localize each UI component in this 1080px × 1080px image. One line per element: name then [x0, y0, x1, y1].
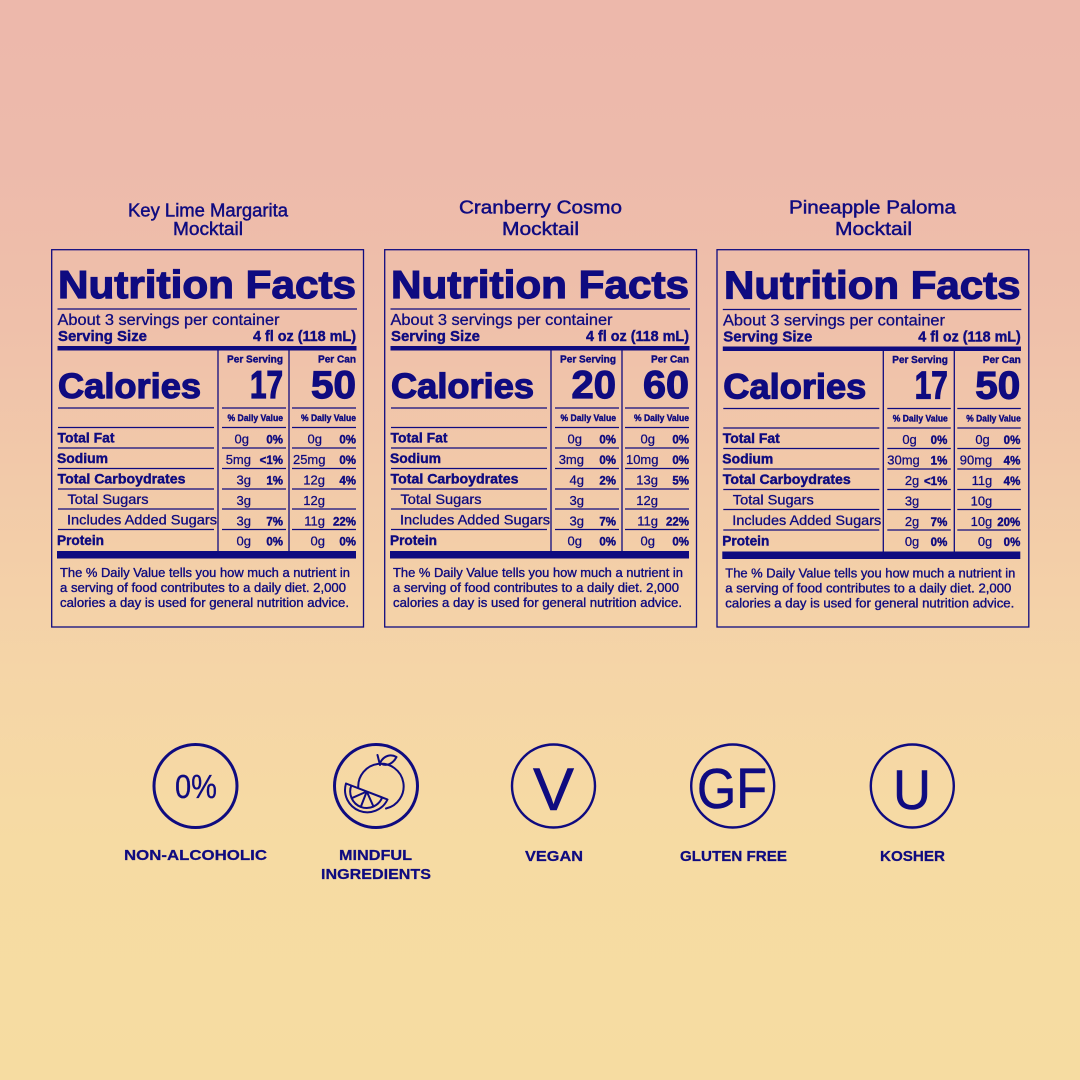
per serving values: 0%	[931, 435, 947, 447]
per can values: 0%	[1004, 435, 1020, 447]
label frame	[385, 250, 696, 627]
serving info	[390, 312, 689, 345]
calories row: 50	[311, 364, 356, 407]
per can values: 11g	[304, 514, 325, 528]
per can values: 20%	[997, 517, 1020, 529]
serving info: About 3 servings per container	[390, 312, 612, 329]
per serving values	[887, 432, 947, 549]
calories row	[58, 354, 356, 423]
heading: Nutrition Facts	[391, 264, 689, 307]
product title: Cranberry Cosmo	[459, 198, 622, 218]
per can values: 13g	[636, 472, 658, 488]
icon: gluten free GF: GF	[697, 757, 767, 821]
thick bars	[57, 346, 356, 558]
calories row: Per Can	[651, 354, 689, 366]
label: non-alcoholic: NON-ALCOHOLIC	[124, 847, 267, 864]
per serving values: 0g	[902, 432, 917, 447]
per can values: 10mg	[626, 452, 658, 467]
panel: Cranberry Cosmo	[385, 198, 696, 627]
per can values: 0%	[339, 434, 356, 446]
per serving values: 7%	[931, 517, 947, 529]
footnote: a serving of food contributes to a daily diet. 2,000	[393, 581, 679, 595]
label: vegan: VEGAN	[525, 848, 583, 865]
per can values: 0g	[978, 534, 992, 549]
per serving values: 0%	[599, 536, 616, 548]
per serving values: 0%	[266, 536, 283, 548]
icon: non-alcoholic 0%: 0%	[175, 768, 217, 805]
calories row: % Daily Value	[301, 413, 356, 423]
serving info: Serving Size	[391, 328, 480, 345]
per serving values: 0g	[568, 534, 582, 548]
per can values: 11g	[972, 473, 992, 488]
footnote	[393, 566, 683, 610]
label: gluten free: GLUTEN FREE	[680, 848, 787, 865]
per serving values: <1%	[260, 455, 283, 467]
per serving values	[559, 432, 616, 548]
icon: citrus fruit	[334, 744, 418, 828]
label: mindful ingredients	[321, 847, 431, 883]
per serving values: 4g	[570, 472, 584, 488]
nutrient labels: Total Carboydrates	[723, 472, 851, 487]
per can values: 0%	[672, 434, 689, 446]
calories row: % Daily Value	[966, 414, 1021, 424]
label: mindful ingredients: MINDFUL	[339, 847, 412, 864]
per can values: 22%	[333, 516, 356, 528]
per can values: 12g	[303, 493, 325, 508]
panel: Pineapple Paloma	[717, 198, 1029, 627]
serving info: Serving Size	[723, 328, 812, 346]
per serving values	[226, 432, 283, 548]
calories row: 20	[572, 364, 616, 407]
per serving values: 1%	[931, 456, 947, 468]
per can values: 0%	[672, 455, 689, 467]
per can values: 12g	[636, 493, 658, 508]
calories row: % Daily Value	[634, 413, 689, 423]
nutrient labels: Total Fat	[723, 431, 780, 446]
per can values: 0g	[308, 432, 322, 446]
label frame	[52, 250, 363, 627]
footnote: a serving of food contributes to a daily diet. 2,000	[725, 582, 1011, 596]
serving info: 4 fl oz (118 mL)	[586, 328, 689, 345]
footnote: a serving of food contributes to a daily diet. 2,000	[60, 581, 346, 595]
per can values: 0g	[641, 534, 655, 548]
thick bars	[722, 346, 1021, 559]
serving info	[723, 312, 1021, 346]
per can values	[626, 432, 689, 548]
calories row: 60	[643, 364, 689, 407]
per can values: 90mg	[960, 452, 992, 468]
per serving values: 0%	[931, 537, 947, 549]
calories row: 17	[250, 364, 283, 407]
per serving values: 3g	[237, 493, 251, 508]
per can values: 4%	[339, 476, 356, 488]
thick bars	[390, 346, 690, 558]
nutrient labels: Total Carboydrates	[390, 472, 518, 486]
per can values: 4%	[1004, 456, 1020, 468]
nutrient labels	[390, 431, 550, 548]
per serving values: 0%	[599, 455, 616, 467]
per serving values: 0g	[905, 534, 919, 549]
nutrient labels: Total Fat	[58, 431, 115, 446]
heading: Nutrition Facts	[724, 264, 1020, 308]
calories row: 17	[915, 364, 948, 408]
serving info: 4 fl oz (118 mL)	[253, 328, 356, 345]
calories row: Per Serving	[227, 354, 283, 366]
per serving values: 2g	[905, 473, 919, 488]
nutrient labels: Sodium	[390, 451, 441, 466]
nutrient labels: Protein	[57, 533, 104, 548]
per serving values: 2%	[599, 476, 616, 488]
calories row: Calories	[391, 367, 534, 406]
nutrient labels: Includes Added Sugars	[732, 512, 881, 528]
per serving values: 7%	[599, 516, 616, 528]
calories row	[723, 354, 1021, 424]
serving info: Serving Size	[58, 328, 147, 345]
nutrient labels: Total Sugars	[68, 491, 148, 507]
footnote: calories a day is used for general nutrition advice.	[393, 596, 682, 610]
per serving values: 0%	[599, 434, 616, 446]
calories row: Per Can	[318, 354, 356, 366]
footnote: The % Daily Value tells you how much a nutrient in	[725, 566, 1015, 580]
icon: vegan V: V	[533, 756, 574, 823]
icon: non-alcoholic 0%	[154, 744, 237, 828]
per serving values: <1%	[924, 476, 947, 488]
footnote: The % Daily Value tells you how much a nutrient in	[393, 566, 683, 580]
per serving values: 7%	[266, 516, 283, 528]
icon: kosher U	[871, 744, 954, 828]
table rules	[390, 309, 690, 551]
calories row: 50	[975, 364, 1020, 408]
product title: Mocktail	[835, 219, 912, 239]
per serving values: 30mg	[887, 452, 920, 468]
footnote	[60, 566, 350, 610]
nutrient labels: Protein	[722, 534, 769, 548]
footnote: The % Daily Value tells you how much a nutrient in	[60, 566, 350, 580]
per can values: 10g	[971, 514, 992, 529]
product title: Mocktail	[502, 219, 579, 239]
table rules	[723, 310, 1021, 552]
table rules	[58, 309, 357, 551]
nutrient labels	[57, 431, 217, 548]
per serving values: 3g	[570, 493, 584, 508]
nutrient labels: Total Sugars	[733, 492, 814, 508]
nutrient labels: Total Sugars	[400, 491, 482, 507]
nutrient labels: Sodium	[722, 452, 773, 466]
product title: Pineapple Paloma	[789, 198, 957, 218]
calories row: Calories	[723, 368, 866, 406]
calories row	[391, 354, 689, 423]
label frame	[717, 250, 1029, 627]
per can values	[960, 432, 1020, 549]
per can values: 10g	[971, 494, 992, 508]
per serving values: 0g	[568, 432, 582, 446]
per can values: 0g	[641, 432, 655, 446]
per can values: 25mg	[293, 452, 326, 467]
per can values: 4%	[1004, 476, 1020, 488]
nutrient labels: Includes Added Sugars	[400, 512, 550, 528]
per serving values: 0g	[235, 432, 249, 446]
per serving values: 3g	[570, 514, 584, 528]
label: kosher: KOSHER	[880, 848, 945, 865]
per can values: 5%	[672, 476, 689, 488]
per serving values: 3g	[237, 472, 251, 488]
product title	[128, 200, 289, 239]
product title	[459, 198, 622, 239]
footnote: calories a day is used for general nutrition advice.	[725, 596, 1014, 610]
serving info: 4 fl oz (118 mL)	[918, 328, 1021, 346]
nutrient labels	[722, 431, 881, 548]
per can values: 0%	[339, 455, 356, 467]
product title: Mocktail	[173, 219, 243, 239]
serving info	[58, 312, 356, 345]
per can values: 11g	[637, 514, 658, 528]
calories row: % Daily Value	[560, 413, 616, 423]
icon: vegan V	[512, 744, 595, 828]
per serving values: 3g	[905, 494, 919, 508]
per serving values: 5mg	[226, 452, 251, 467]
nutrient labels: Total Fat	[390, 431, 448, 446]
footnote	[725, 566, 1015, 610]
nutrient labels: Protein	[390, 533, 437, 548]
per serving values: 3g	[237, 514, 251, 528]
nutrient labels: Total Carboydrates	[58, 472, 186, 486]
icon: kosher U: U	[893, 758, 931, 821]
nutrient labels: Sodium	[57, 451, 108, 466]
per serving values: 0%	[266, 434, 283, 446]
calories row: Calories	[58, 367, 201, 406]
per can values	[293, 432, 356, 548]
label: mindful ingredients: INGREDIENTS	[321, 866, 431, 883]
per serving values: 3mg	[559, 452, 584, 467]
per can values: 12g	[303, 472, 325, 488]
per serving values: 2g	[905, 514, 919, 529]
per can values: 22%	[666, 516, 689, 528]
serving info: About 3 servings per container	[58, 312, 280, 329]
heading: Nutrition Facts	[58, 264, 356, 307]
product title	[789, 198, 957, 239]
per can values: 0%	[1004, 537, 1020, 549]
calories row: % Daily Value	[228, 413, 283, 423]
serving info: About 3 servings per container	[723, 312, 945, 330]
calories row: Per Serving	[560, 354, 616, 366]
per can values: 0%	[672, 536, 689, 548]
per can values: 0g	[311, 534, 325, 548]
per serving values: 1%	[266, 476, 283, 488]
calories row: % Daily Value	[893, 414, 948, 424]
per serving values: 0g	[237, 534, 251, 548]
per can values: 0g	[975, 432, 990, 447]
per can values: 0%	[339, 536, 356, 548]
calories row: Per Can	[983, 354, 1021, 366]
footnote: calories a day is used for general nutrition advice.	[60, 596, 349, 610]
calories row: Per Serving	[892, 354, 948, 366]
nutrient labels: Includes Added Sugars	[67, 512, 217, 528]
panel: Key Lime Margarita	[52, 200, 363, 627]
product title: Key Lime Margarita	[128, 200, 289, 220]
